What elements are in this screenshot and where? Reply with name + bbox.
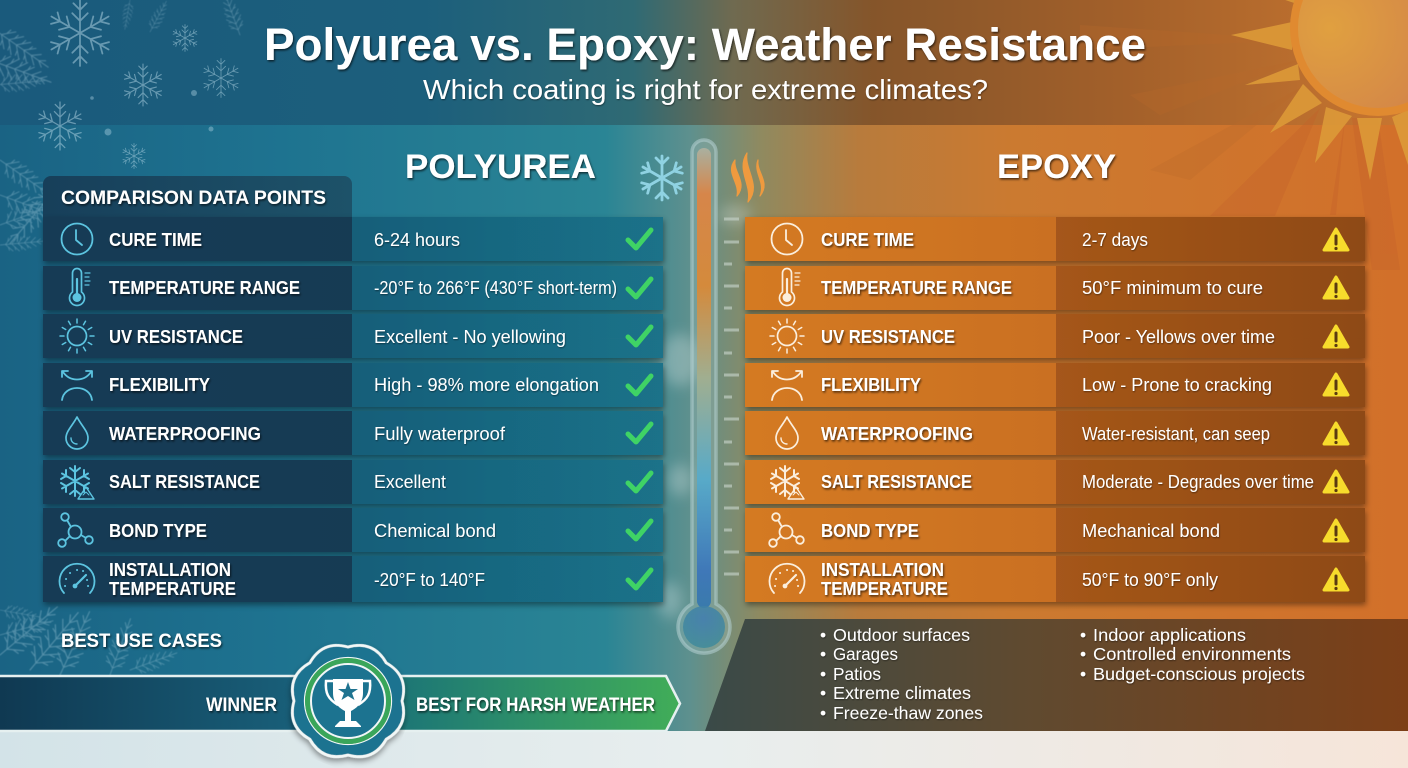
- list: epoxy use cases: [1080, 625, 1305, 684]
- row backgrounds: [745, 217, 1365, 602]
- mist clouds: [658, 206, 751, 618]
- row: temperature range: [780, 268, 1348, 306]
- list: polyurea use cases: Patios: [833, 664, 881, 684]
- row: waterproofing: [66, 417, 651, 449]
- list: polyurea use cases: •: [820, 664, 826, 684]
- row: uv resistance: [770, 319, 1348, 353]
- winner badge: [272, 625, 424, 768]
- row: bond type: BOND TYPE: [821, 521, 919, 541]
- row: installation temperature: [770, 560, 1348, 599]
- heading: epoxy: EPOXY: [997, 148, 1116, 186]
- heading: polyurea: POLYUREA: [405, 148, 596, 186]
- winner ribbon: WINNER: [206, 695, 277, 716]
- icon: snowflake: [640, 156, 684, 200]
- list: polyurea use cases: Garages: [833, 644, 898, 664]
- row: cure time: CURE TIME: [109, 230, 202, 250]
- row: flexibility: [62, 371, 651, 400]
- row: salt resistance: [771, 466, 1348, 499]
- list: epoxy use cases: Indoor applications: [1093, 625, 1246, 645]
- row: bond type: [769, 513, 1348, 547]
- row: installation temperature: -20°F to 140°F: [374, 570, 485, 590]
- list: polyurea use cases: [820, 625, 983, 723]
- row: waterproofing: WATERPROOFING: [821, 424, 973, 444]
- list: polyurea use cases: •: [820, 625, 826, 645]
- row: uv resistance: Excellent - No yellowing: [374, 327, 566, 347]
- row: temperature range: 50°F minimum to cure: [1082, 278, 1263, 298]
- row: salt resistance: Excellent: [374, 472, 446, 492]
- row: flexibility: [772, 371, 1348, 400]
- list: epoxy use cases: Controlled environments: [1093, 644, 1291, 664]
- panel: polyurea table: [43, 176, 663, 602]
- header tab: comparison data points: COMPARISON DATA POINTS: [61, 187, 326, 209]
- row: installation temperature: INSTALLATION: [109, 560, 231, 580]
- list: polyurea use cases: •: [820, 644, 826, 664]
- row: salt resistance: SALT RESISTANCE: [821, 472, 972, 492]
- row: cure time: 2-7 days: [1082, 230, 1148, 250]
- row: bond type: [58, 513, 651, 547]
- row: cure time: 6-24 hours: [374, 230, 460, 250]
- thermometer: [678, 140, 739, 653]
- row: uv resistance: UV RESISTANCE: [821, 327, 955, 347]
- row backgrounds: [43, 217, 663, 602]
- icon: heat waves: [732, 153, 764, 202]
- list: polyurea use cases: •: [820, 683, 826, 703]
- panel: epoxy table: [745, 217, 1365, 602]
- list: polyurea use cases: Freeze-thaw zones: [833, 703, 983, 723]
- row: salt resistance: SALT RESISTANCE: [109, 472, 260, 492]
- row: flexibility: High - 98% more elongation: [374, 375, 599, 395]
- row: salt resistance: Moderate - Degrades over time: [1082, 472, 1314, 492]
- row: uv resistance: [60, 319, 651, 353]
- row: uv resistance: UV RESISTANCE: [109, 327, 243, 347]
- winner ribbon: BEST FOR HARSH WEATHER: [416, 695, 655, 716]
- row: bond type: BOND TYPE: [109, 521, 207, 541]
- list: polyurea use cases: Outdoor surfaces: [833, 625, 970, 645]
- sun decoration: [1080, 0, 1408, 270]
- list: polyurea use cases: •: [820, 703, 826, 723]
- row: flexibility: FLEXIBILITY: [821, 375, 921, 395]
- row: cure time: [62, 224, 651, 254]
- list: polyurea use cases: Extreme climates: [833, 683, 971, 703]
- row: cure time: [772, 224, 1348, 254]
- subtitle: Which coating is right for extreme climates?: [423, 74, 988, 105]
- row: temperature range: [70, 268, 651, 306]
- row: waterproofing: Fully waterproof: [374, 424, 506, 444]
- row: salt resistance: [61, 466, 651, 499]
- row: bond type: Mechanical bond: [1082, 521, 1220, 541]
- header tab: comparison data points: [43, 176, 352, 217]
- row: installation temperature: TEMPERATURE: [109, 579, 236, 599]
- row: temperature range: TEMPERATURE RANGE: [821, 278, 1012, 298]
- list: epoxy use cases: •: [1080, 625, 1086, 645]
- row: installation temperature: INSTALLATION: [821, 560, 944, 580]
- row: flexibility: Low - Prone to cracking: [1082, 375, 1272, 395]
- winner ribbon: [0, 676, 680, 731]
- panel: epoxy best use cases: [705, 619, 1408, 731]
- list: epoxy use cases: Budget-conscious projects: [1093, 664, 1305, 684]
- icon: trophy: [304, 658, 392, 744]
- snowflakes and frost decoration: [0, 0, 247, 680]
- list: epoxy use cases: •: [1080, 644, 1086, 664]
- heading: best use cases: BEST USE CASES: [61, 630, 222, 652]
- row: bond type: Chemical bond: [374, 521, 496, 541]
- row: installation temperature: 50°F to 90°F only: [1082, 570, 1218, 590]
- row: waterproofing: WATERPROOFING: [109, 424, 261, 444]
- row: cure time: CURE TIME: [821, 230, 914, 250]
- row: installation temperature: [60, 560, 651, 599]
- row: waterproofing: [776, 417, 1348, 449]
- row: waterproofing: Water-resistant, can seep: [1082, 424, 1270, 444]
- row: flexibility: FLEXIBILITY: [109, 375, 210, 395]
- row: uv resistance: Poor - Yellows over time: [1082, 327, 1275, 347]
- title: Polyurea vs. Epoxy: Weather Resistance: [264, 19, 1146, 70]
- row: installation temperature: TEMPERATURE: [821, 579, 948, 599]
- row: temperature range: -20°F to 266°F (430°F short-term): [374, 278, 617, 298]
- row: temperature range: TEMPERATURE RANGE: [109, 278, 300, 298]
- list: epoxy use cases: •: [1080, 664, 1086, 684]
